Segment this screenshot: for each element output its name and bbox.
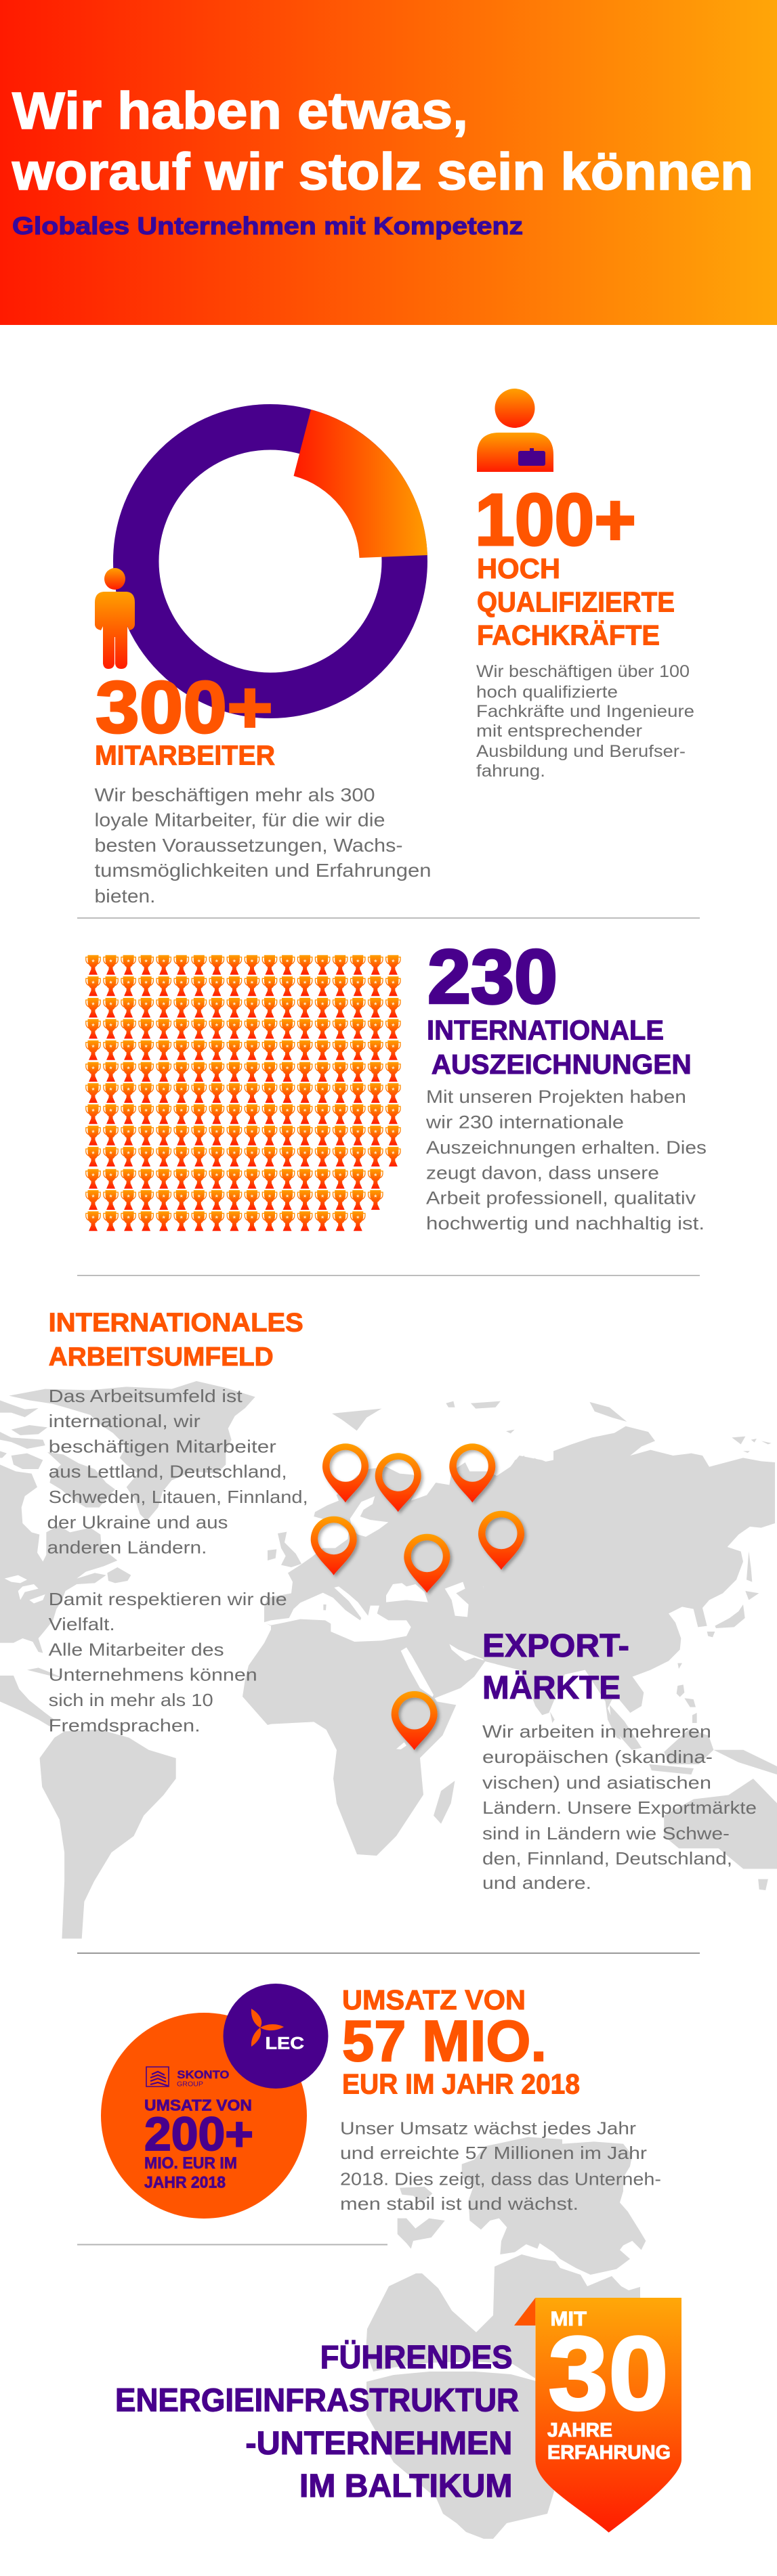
panel: revenue (101, 1984, 661, 2219)
map: Baltic states (366, 2137, 646, 2539)
text block: international environment: Fremdsprachen. (49, 1716, 201, 1736)
text block: revenue (340, 2118, 661, 2214)
heading: international environment: ARBEITSUMFELD (49, 1342, 274, 1372)
heading: leading energy infrastructure company: IM BALTIKUM (299, 2468, 512, 2504)
text block: international environment: aus Lettland, Deutschland, (49, 1461, 287, 1481)
text block: awards: wir 230 internationale (425, 1112, 624, 1133)
stat: 230: 230 (427, 934, 558, 1020)
panel: employees (95, 410, 431, 907)
text block: employees (95, 785, 431, 907)
map pins (311, 1443, 524, 1750)
text block: export markets: europäischen (skandina- (482, 1747, 713, 1767)
text block: export markets: den, Finnland, Deutschland, (482, 1848, 732, 1869)
logo: Skonto Group (146, 2067, 229, 2089)
heading: export markets: MÄRKTE (482, 1670, 621, 1706)
donut chart (136, 410, 427, 695)
text: Skonto revenue figures: MIO. EUR IM (144, 2154, 237, 2173)
heading: LEC revenue: EUR IM JAHR 2018 (342, 2068, 580, 2100)
text block: revenue: 2018. Dies zeigt, dass das Unterneh- (340, 2169, 661, 2189)
text block: specialists: Fachkräfte und Ingenieure (476, 702, 694, 721)
text block: specialists: Ausbildung und Berufser- (476, 742, 686, 761)
text block: revenue: und erreichte 57 Millionen im Jahr (340, 2143, 647, 2163)
text: Skonto revenue figures: UMSATZ VON (144, 2097, 252, 2114)
panel: international (0, 1309, 777, 1939)
title: worauf wir stolz sein können (12, 143, 753, 201)
panel: awards (86, 934, 707, 1234)
heading: awards: AUSZEICHNUNGEN (432, 1049, 692, 1080)
heading: specialists: HOCH (477, 552, 560, 584)
text block: international environment: Unternehmens können (49, 1664, 257, 1684)
heading: export markets: EXPORT- (482, 1628, 629, 1664)
heading: LEC revenue: 57 MIO. (342, 2009, 547, 2074)
text block: specialists (476, 662, 694, 781)
ribbon badge: 30 years (514, 2298, 681, 2533)
text block: employees: bieten. (95, 886, 156, 907)
text block: international environment: Alle Mitarbeiter des (49, 1640, 224, 1660)
text block: awards: Arbeit professionell, qualitativ (426, 1188, 696, 1208)
ribbon badge: 30 years: MIT (550, 2308, 587, 2330)
text block: specialists: fahrung. (476, 762, 545, 781)
text block: specialists: Wir beschäftigen über 100 (476, 662, 690, 681)
text block: revenue: Unser Umsatz wächst jedes Jahr (340, 2118, 636, 2139)
heading: leading energy infrastructure company: FÜHRENDES (320, 2340, 513, 2376)
heading: specialists: FACHKRÄFTE (477, 619, 660, 651)
text block: international environment: international, wir (49, 1411, 201, 1431)
world map (0, 1381, 777, 1939)
text block: awards: Mit unseren Projekten haben (426, 1087, 686, 1107)
header banner (0, 0, 777, 325)
text block: awards (425, 1087, 707, 1234)
text block: employees: Wir beschäftigen mehr als 300 (95, 785, 375, 806)
circle: LEC logo (224, 1984, 328, 2089)
icon: person with briefcase (477, 389, 553, 472)
text block: employees: tumsmöglichkeiten und Erfahrungen (95, 860, 431, 881)
text block: international environment: der Ukraine und aus (47, 1512, 228, 1533)
heading: international environment (49, 1309, 303, 1372)
ribbon badge: 30 years: ERFAHRUNG (547, 2442, 671, 2464)
circle: Skonto Group revenue (101, 2013, 307, 2219)
stat: 300+: 300+ (96, 666, 273, 749)
text: Skonto revenue figures (144, 2097, 253, 2192)
heading: leading energy infrastructure company: ENERGIEINFRASTRUKTUR (115, 2383, 519, 2419)
text block: export markets (482, 1722, 757, 1893)
text block: revenue: men stabil ist und wächst. (340, 2193, 579, 2214)
text block: international environment: Vielfalt. (49, 1614, 115, 1634)
text block: export markets: Wir arbeiten in mehreren (482, 1722, 711, 1742)
pictogram: 230 trophies (86, 955, 400, 1231)
heading: Mitarbeiter: MITARBEITER (95, 739, 275, 770)
subtitle: Globales Unternehmen mit Kompetenz (12, 212, 523, 240)
stat: 100+: 100+ (475, 479, 636, 561)
text: Skonto revenue figures: JAHR 2018 (144, 2174, 226, 2192)
heading: awards: INTERNATIONALE (427, 1015, 664, 1046)
text block: awards: zeugt davon, dass unsere (426, 1162, 659, 1183)
heading: awards (427, 1015, 692, 1080)
text block: specialists: hoch qualifizierte (476, 682, 618, 701)
text block: awards: hochwertig und nachhaltig ist. (426, 1213, 705, 1234)
text block: export markets: und andere. (482, 1873, 591, 1893)
circle: LEC logo: LEC (266, 2034, 304, 2053)
heading: specialists (477, 552, 675, 651)
heading: leading energy infrastructure company (115, 2340, 519, 2504)
ribbon badge: 30 years: JAHRE (547, 2420, 612, 2441)
heading: leading energy infrastructure company: -UNTERNEHMEN (245, 2426, 512, 2462)
panel: leading company (115, 2298, 681, 2533)
text block: employees: loyale Mitarbeiter, für die wir die (95, 810, 385, 830)
heading: export markets (482, 1628, 629, 1706)
icon: wind turbine (251, 2009, 284, 2047)
heading: LEC revenue (342, 1984, 580, 2100)
panel: specialists (475, 389, 694, 781)
text block: export markets: Ländern. Unsere Exportmärkte (482, 1797, 757, 1818)
text block: awards: Auszeichnungen erhalten. Dies (426, 1137, 707, 1158)
text block: international environment: beschäftigen Mitarbeiter (49, 1437, 276, 1457)
heading: LEC revenue: UMSATZ VON (342, 1984, 526, 2015)
heading: specialists: QUALIFIZIERTE (477, 586, 675, 617)
text block: export markets: sind in Ländern wie Schwe- (482, 1823, 730, 1843)
text block: export markets: vischen) und asiatischen (482, 1772, 711, 1793)
heading: international environment: INTERNATIONALES (49, 1309, 303, 1338)
text block: international environment (47, 1386, 308, 1736)
ribbon badge: 30 years: 30 (548, 2315, 669, 2432)
text block: international environment: anderen Ländern. (47, 1537, 207, 1557)
text block: international environment: Schweden, Litauen, Finnland, (49, 1487, 308, 1507)
text block: international environment: sich in mehr als 10 (49, 1690, 213, 1710)
text block: specialists: mit entsprechender (476, 722, 642, 741)
text: Skonto revenue figures: 200+ (144, 2108, 253, 2160)
logo: Skonto Group: GROUP (177, 2081, 203, 2089)
text block: international environment: Damit respektieren wir die (49, 1589, 287, 1609)
icon: person (95, 568, 135, 669)
title (12, 82, 753, 201)
text block: international environment: Das Arbeitsumfeld ist (49, 1386, 243, 1406)
logo: Skonto Group: SKONTO (177, 2068, 229, 2081)
title: Wir haben etwas, (12, 82, 468, 140)
text block: employees: besten Voraussetzungen, Wachs- (95, 835, 402, 856)
